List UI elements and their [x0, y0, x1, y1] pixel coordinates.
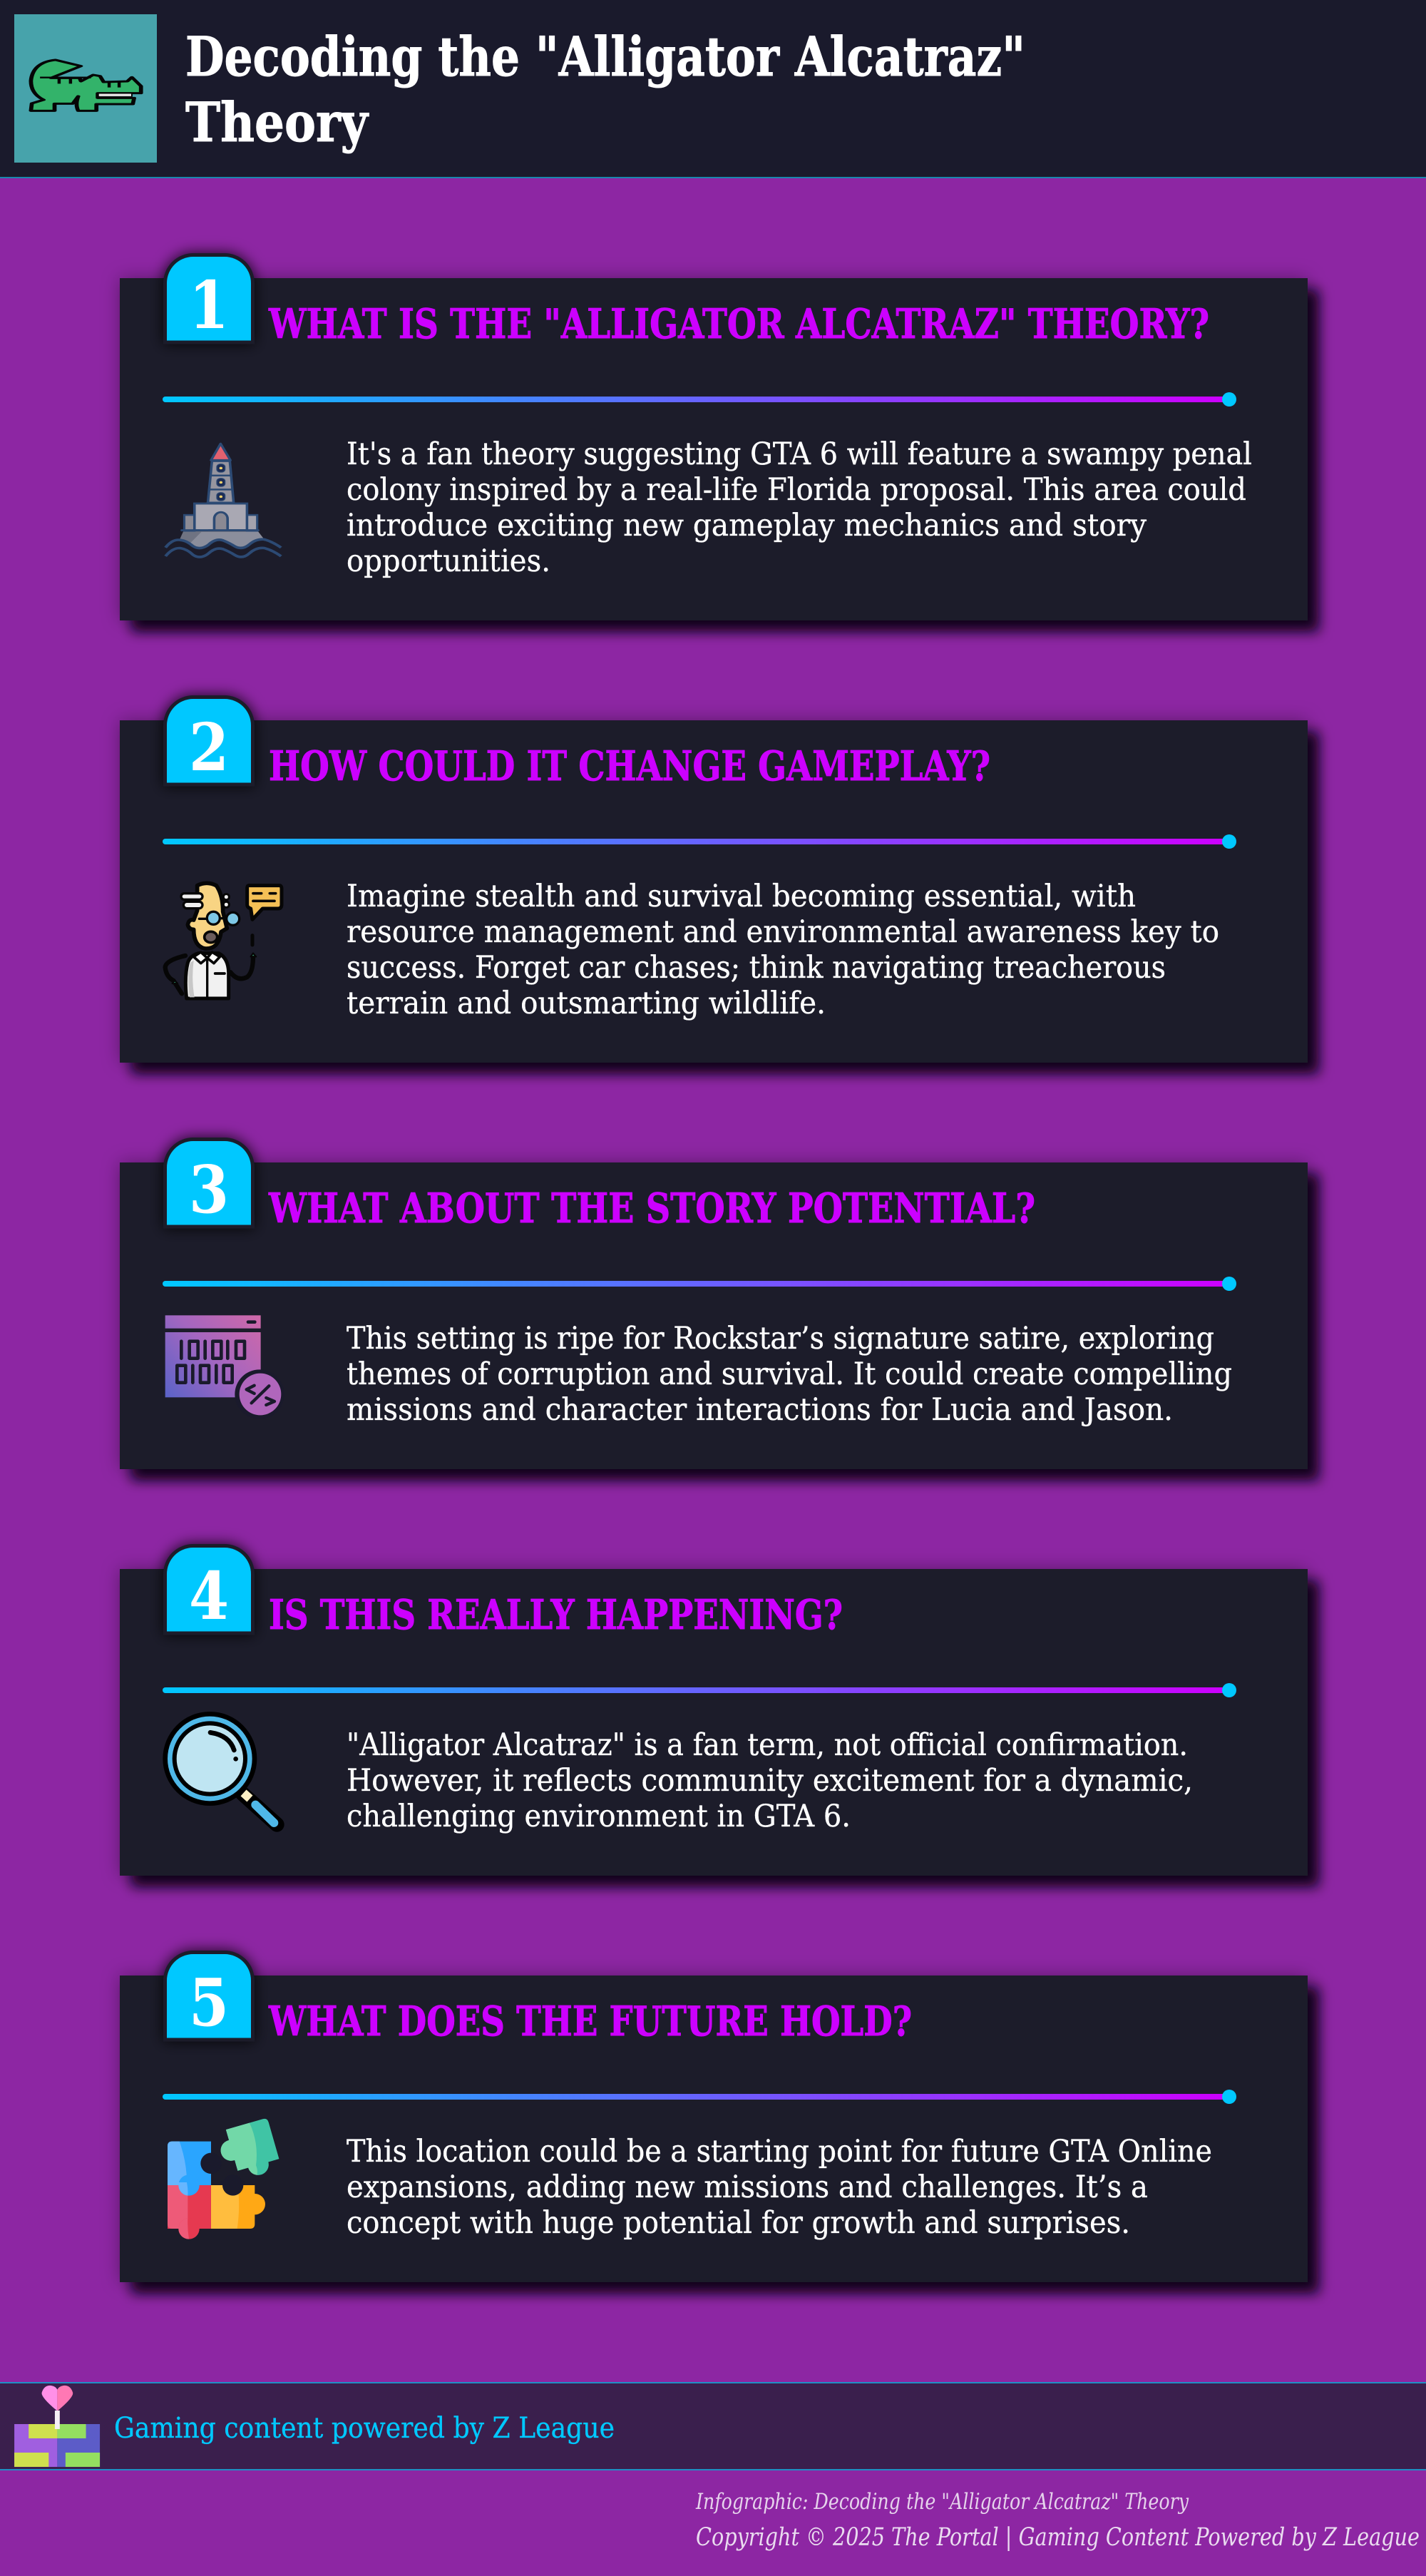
body text [347, 1727, 1193, 1834]
panel: card 5 [120, 1954, 1308, 2282]
heading: HOW COULD IT CHANGE GAMEPLAY? [269, 742, 990, 790]
title: Decoding the "Alligator Alcatraz" [185, 25, 1025, 88]
body text: themes of corruption and survival. It could create compelling [347, 1356, 1232, 1392]
body text: This setting is ripe for Rockstar’s signature satire, exploring [347, 1321, 1214, 1356]
icon: puzzle pieces [168, 2117, 282, 2239]
number badge 3 [167, 1141, 251, 1228]
divider with dot [163, 1683, 1236, 1697]
body text: missions and character interactions for Lucia and Jason. [347, 1392, 1173, 1428]
body text [347, 2134, 1212, 2241]
body text: It's a fan theory suggesting GTA 6 will feature a swampy penal [347, 436, 1252, 472]
icon: lighthouse [165, 444, 281, 557]
footer tagline: Gaming content powered by Z League [114, 2412, 615, 2445]
number badge 2: 2 [189, 709, 229, 786]
credits: Infographic: Decoding the "Alligator Alcatraz" Theory [695, 2489, 1189, 2515]
body text: challenging environment in GTA 6. [347, 1799, 851, 1834]
divider with dot [163, 2090, 1236, 2104]
icon: scientist with speech bubble [165, 883, 282, 999]
header [0, 0, 1426, 178]
body text [347, 1321, 1232, 1428]
body text: terrain and outsmarting wildlife. [347, 986, 826, 1021]
body text: expansions, adding new missions and challenges. It’s a [347, 2169, 1148, 2205]
body text: This location could be a starting point for future GTA Online [347, 2134, 1212, 2169]
body text: concept with huge potential for growth and surprises. [347, 2205, 1130, 2241]
number badge 1: 1 [189, 267, 229, 344]
divider with dot [163, 392, 1236, 407]
heading: WHAT ABOUT THE STORY POTENTIAL? [268, 1185, 1035, 1232]
icon: Z League joystick [14, 2386, 100, 2467]
heading: WHAT IS THE "ALLIGATOR ALCATRAZ" THEORY? [268, 300, 1209, 348]
credits [695, 2489, 1420, 2552]
body text: "Alligator Alcatraz" is a fan term, not official confirmation. [347, 1727, 1188, 1763]
number badge 2 [167, 699, 251, 786]
body text [347, 436, 1252, 579]
body text: success. Forget car chases; think navigating treacherous [347, 950, 1166, 986]
heading: IS THIS REALLY HAPPENING? [269, 1591, 843, 1639]
number badge 3: 3 [189, 1151, 229, 1228]
title [185, 25, 1025, 154]
body text: colony inspired by a real-life Florida proposal. This area could [347, 472, 1246, 508]
number badge 1 [167, 257, 251, 344]
divider with dot [163, 834, 1236, 849]
number badge 4: 4 [189, 1558, 229, 1635]
title: Theory [185, 91, 369, 154]
body text [347, 879, 1219, 1021]
body text: introduce exciting new gameplay mechanics and story [347, 508, 1147, 543]
icon: alligator logo [14, 14, 157, 163]
panel: card 2 [120, 699, 1308, 1063]
footer band [0, 2382, 1426, 2470]
icon: magnifying glass [163, 1712, 277, 1824]
body text: However, it reflects community excitement for a dynamic, [347, 1763, 1193, 1799]
number badge 5 [167, 1954, 251, 2041]
body text: resource management and environmental awareness key to [347, 914, 1219, 950]
divider with dot [163, 1277, 1236, 1291]
body text: Imagine stealth and survival becoming essential, with [347, 879, 1136, 914]
icon: binary code window [165, 1315, 284, 1419]
body text: opportunities. [347, 543, 550, 579]
number badge 5: 5 [189, 1964, 229, 2041]
panel: card 4 [120, 1548, 1308, 1876]
heading: WHAT DOES THE FUTURE HOLD? [268, 1998, 912, 2045]
panel: card 1 [120, 257, 1308, 620]
panel: card 3 [120, 1141, 1308, 1469]
number badge 4 [167, 1548, 251, 1635]
